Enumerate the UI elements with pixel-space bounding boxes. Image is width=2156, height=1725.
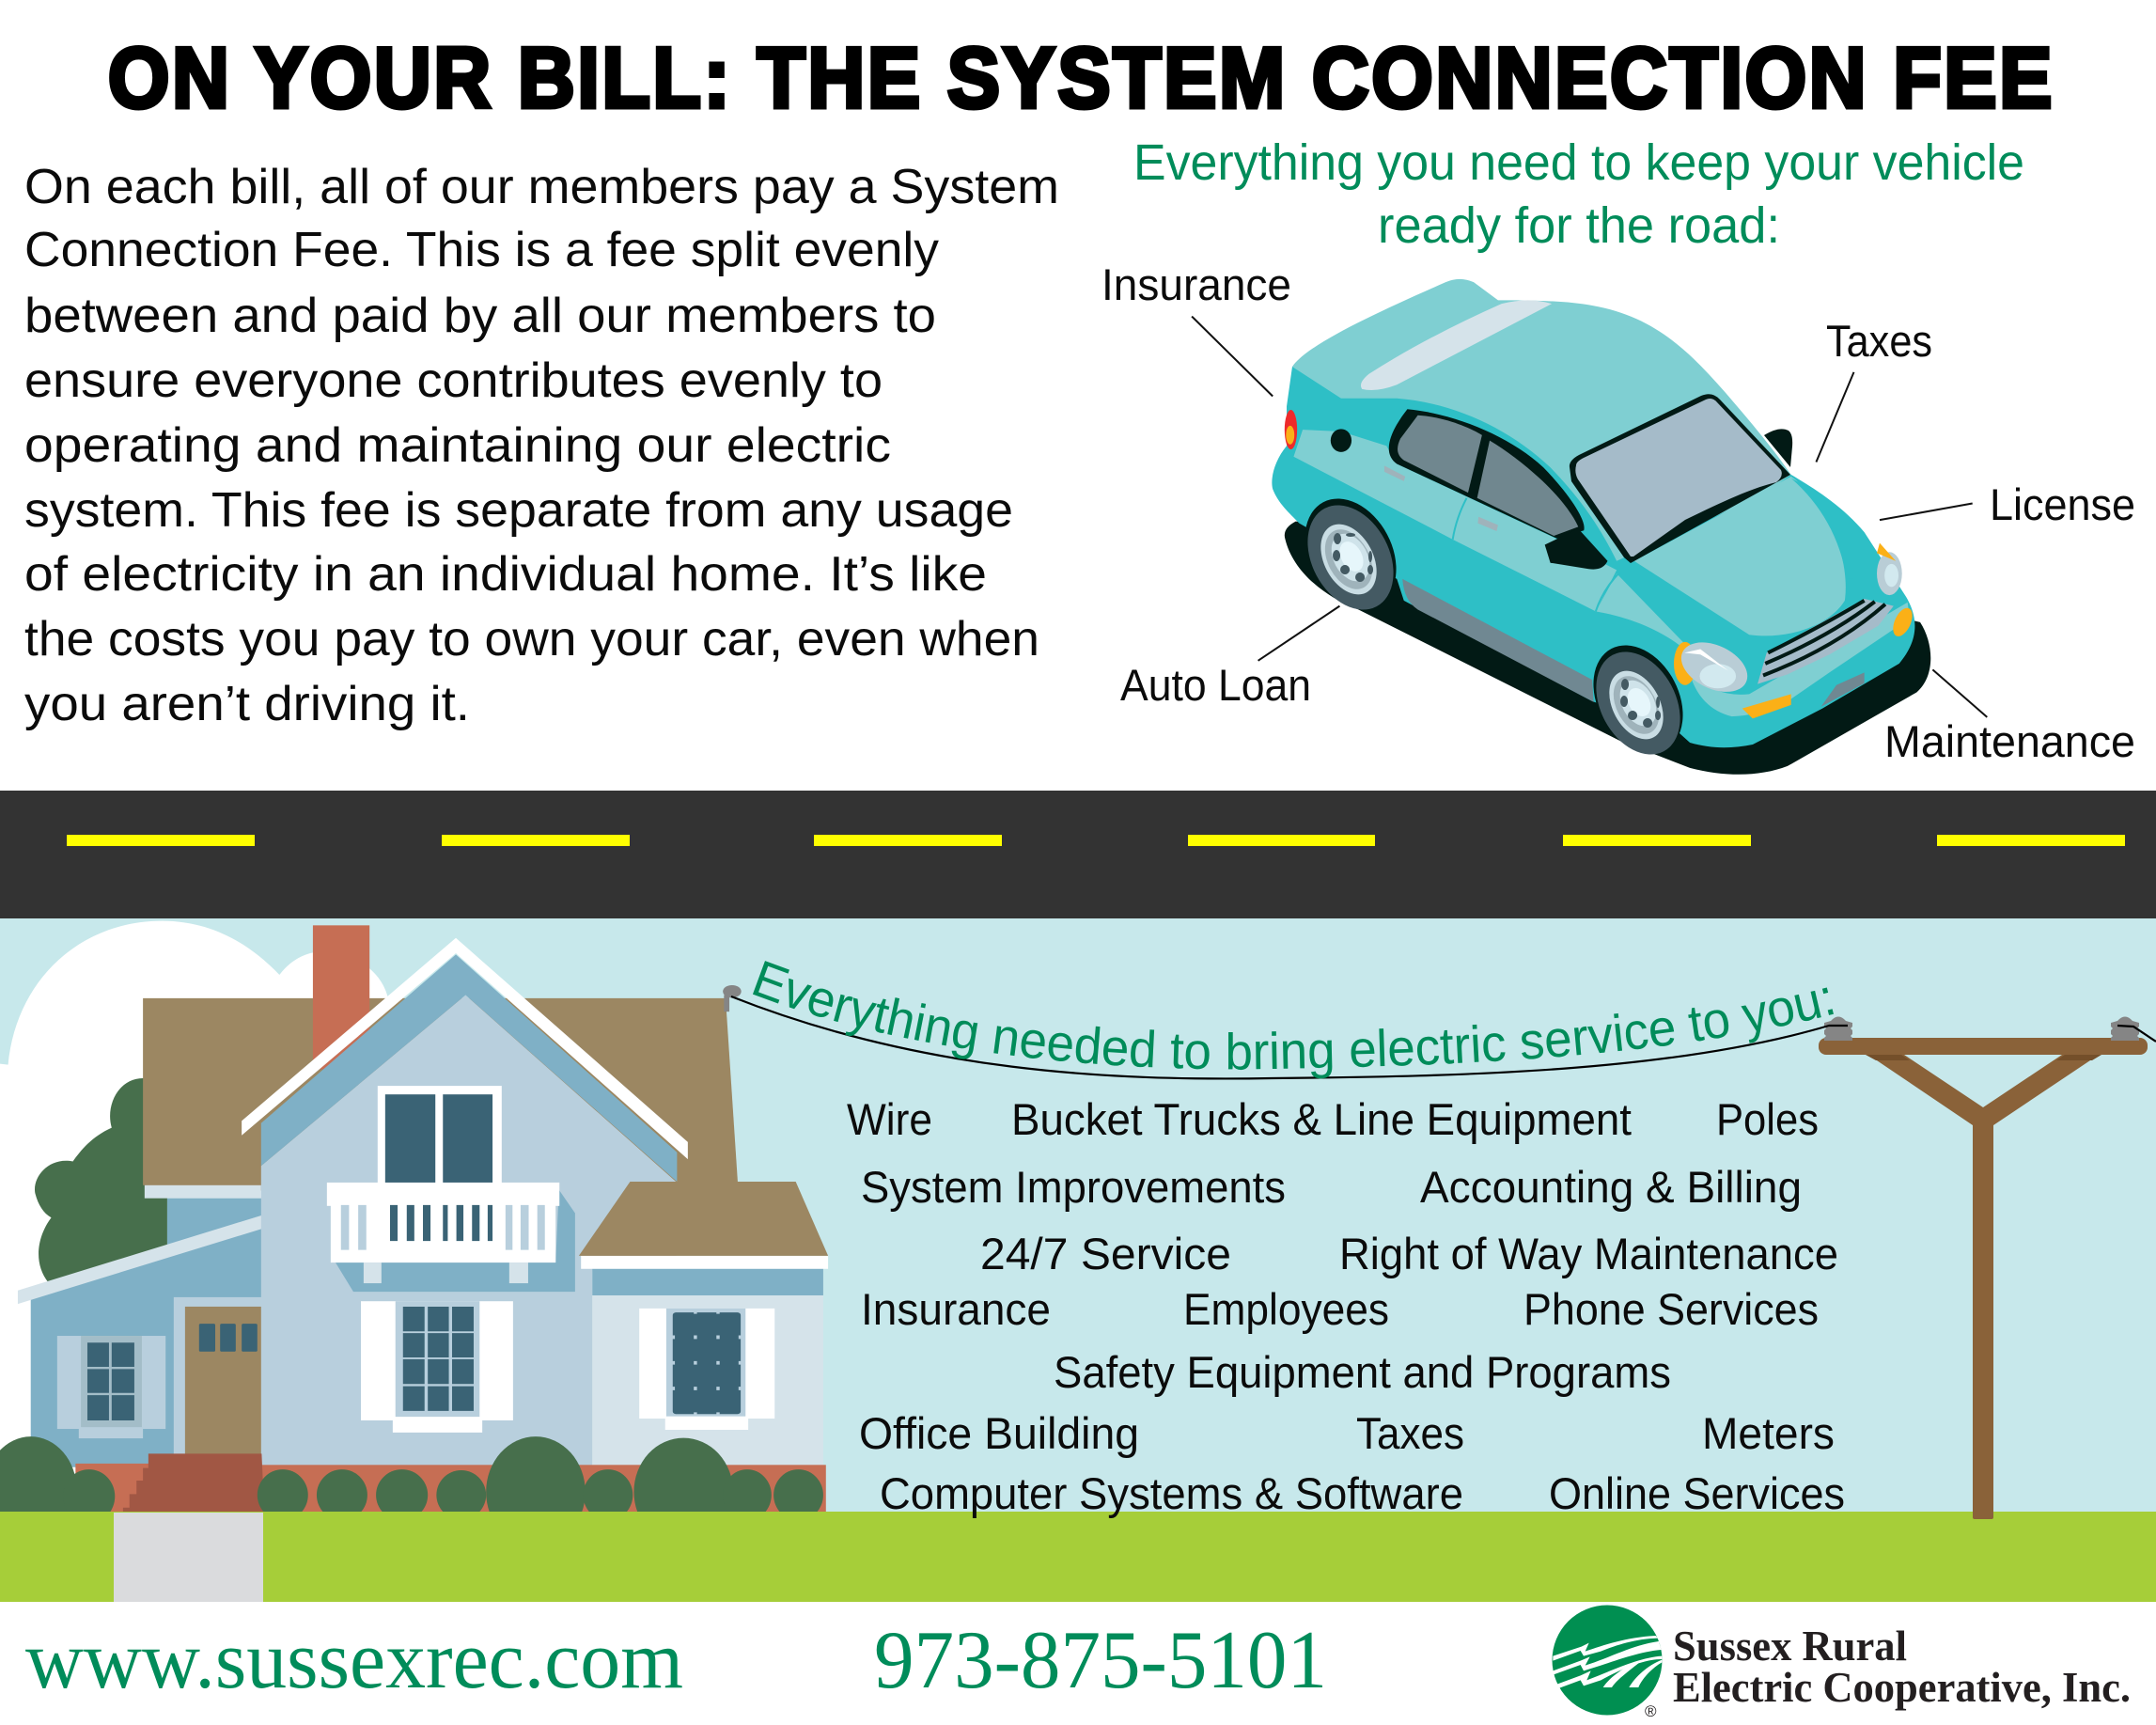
car label: Taxes: Taxes bbox=[1826, 316, 1932, 366]
list: electric service costs: Online Services bbox=[1549, 1468, 1845, 1518]
text block: explanation: On each bill, all of our members pay a System bbox=[24, 160, 1059, 214]
logo: Sussex Rural: Sussex Rural bbox=[1673, 1623, 1907, 1670]
list: electric service costs: Accounting & Billing bbox=[1420, 1162, 1802, 1212]
text block: explanation: operating and maintaining our electric bbox=[24, 418, 891, 473]
road bbox=[0, 791, 2156, 918]
curved heading: electric service: Everything needed to bring electric service to you: bbox=[753, 961, 1834, 1079]
list: electric service costs: Poles bbox=[1716, 1094, 1819, 1144]
text block: explanation: you aren’t driving it. bbox=[24, 677, 470, 731]
list: electric service costs: 24/7 Service bbox=[980, 1229, 1231, 1278]
text block: explanation: ensure everyone contributes evenly to bbox=[24, 353, 883, 408]
list: electric service costs: Right of Way Maintenance bbox=[1339, 1229, 1838, 1278]
heading: vehicle bbox=[1133, 134, 2024, 254]
text block: explanation: system. This fee is separate from any usage bbox=[24, 483, 1013, 538]
text block: explanation bbox=[24, 160, 1059, 731]
website: www.sussexrec.com bbox=[25, 1615, 683, 1706]
logo: Sussex Rural: ® bbox=[1645, 1702, 1657, 1720]
list: electric service costs: Employees bbox=[1183, 1284, 1389, 1334]
list: electric service costs: Meters bbox=[1702, 1408, 1835, 1458]
title: ON YOUR BILL: THE SYSTEM CONNECTION FEE bbox=[108, 31, 2054, 126]
heading: vehicle: Everything you need to keep your vehicle bbox=[1133, 134, 2024, 191]
car label: Auto Loan: Auto Loan bbox=[1120, 660, 1311, 710]
text block: explanation: the costs you pay to own your car, even when bbox=[24, 612, 1039, 666]
list: electric service costs: Phone Services bbox=[1523, 1284, 1819, 1334]
leader lines: car cost labels bbox=[1192, 317, 1987, 717]
illustration: house bbox=[0, 921, 828, 1547]
list: electric service costs bbox=[847, 1094, 1845, 1518]
power lines bbox=[731, 996, 2156, 1078]
list: electric service costs: Computer Systems & Software bbox=[880, 1468, 1463, 1518]
list: electric service costs: Safety Equipment and Programs bbox=[1054, 1347, 1671, 1397]
list: electric service costs: Bucket Trucks & Line Equipment bbox=[1011, 1094, 1632, 1144]
sky bbox=[0, 918, 2156, 1513]
list: electric service costs: Insurance bbox=[861, 1284, 1051, 1334]
list: electric service costs: Office Building bbox=[859, 1408, 1139, 1458]
text block: explanation: of electricity in an individual home. It’s like bbox=[24, 547, 987, 602]
text block: explanation: Connection Fee. This is a fee split evenly bbox=[24, 223, 939, 277]
illustration: car bbox=[1272, 279, 1930, 775]
heading: vehicle: ready for the road: bbox=[1378, 197, 1780, 254]
grass bbox=[0, 1512, 2156, 1602]
list: electric service costs: Taxes bbox=[1356, 1408, 1464, 1458]
walkway bbox=[114, 1513, 263, 1602]
car label: Maintenance: Maintenance bbox=[1884, 716, 2135, 766]
list: electric service costs: System Improvements bbox=[861, 1162, 1286, 1212]
text block: explanation: between and paid by all our members to bbox=[24, 289, 936, 343]
car label: License: License bbox=[1990, 479, 2135, 529]
logo: Sussex Rural: Electric Cooperative, Inc. bbox=[1673, 1664, 2131, 1711]
car label: Insurance: Insurance bbox=[1101, 259, 1291, 309]
logo: Sussex Rural bbox=[1553, 1606, 2131, 1720]
utility pole bbox=[1819, 1017, 2148, 1519]
list: electric service costs: Wire bbox=[847, 1094, 932, 1144]
phone: 973-875-5101 bbox=[874, 1615, 1327, 1706]
